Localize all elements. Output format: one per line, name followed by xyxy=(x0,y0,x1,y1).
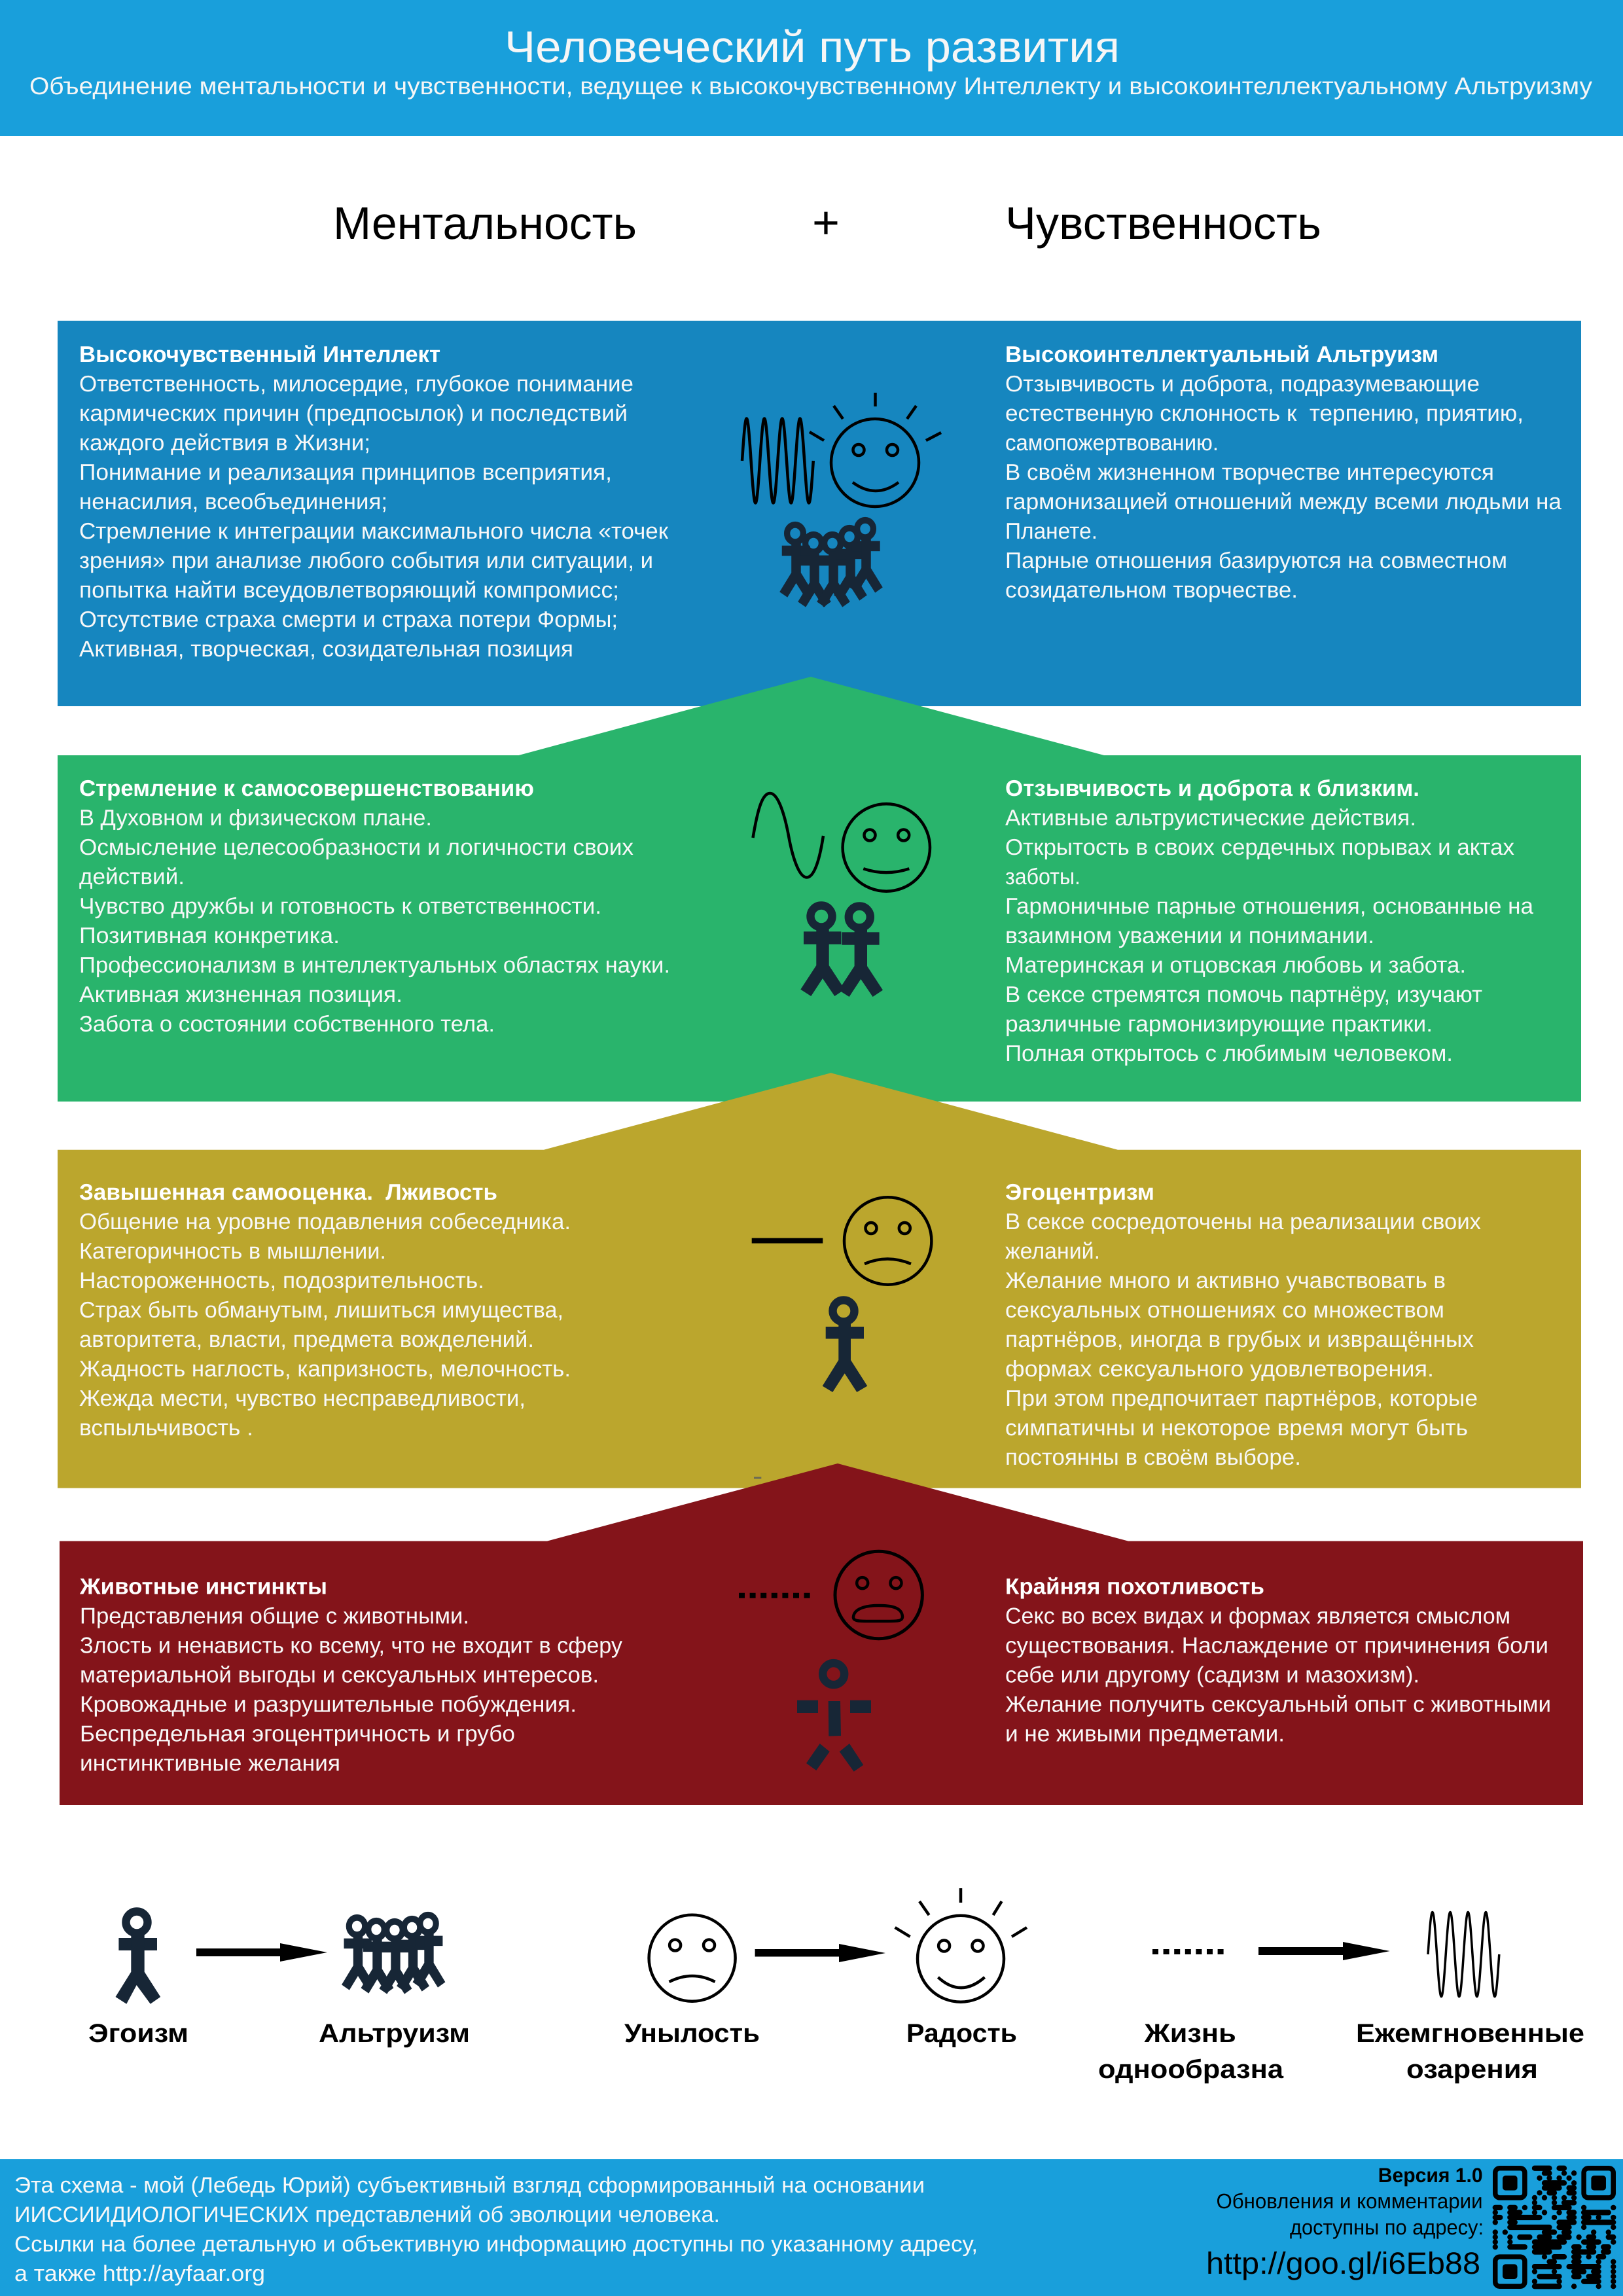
QR code xyxy=(1495,2168,1613,2286)
text: responsiveness and kindness: заботы. xyxy=(1005,865,1080,889)
text: egocentrism: формах сексуального удовлетворения. xyxy=(1005,1357,1434,1382)
text: responsiveness and kindness xyxy=(1005,776,1534,1066)
text: striving for self-improvement: В Духовном и физическом плане. xyxy=(79,806,432,831)
text: inflated self-esteem: Страх быть обманутым, лишиться имущества, xyxy=(79,1298,563,1323)
version and link: Версия 1.0 xyxy=(1378,2164,1483,2187)
heading: sensuality: Чувственность xyxy=(1005,198,1321,249)
text: egocentrism: При этом предпочитает партнёров, которые xyxy=(1005,1386,1478,1411)
text: animal instincts xyxy=(79,1575,623,1776)
text: responsiveness and kindness: взаимном уважении и понимании. xyxy=(1005,924,1374,948)
text: egocentrism: Желание много и активно учавствовать в xyxy=(1005,1268,1446,1293)
icon: dotted line xyxy=(1152,1949,1224,1954)
text: egocentrism: партнёров, иногда в грубых и извращённых xyxy=(1005,1327,1474,1352)
text: striving for self-improvement: Осмысление целесообразности и логичности своих xyxy=(79,835,633,860)
icon: two people xyxy=(800,906,883,997)
text: high-sensual intellect: кармических причин (предпосылок) и последствий xyxy=(79,401,628,426)
icon: neutral face xyxy=(843,804,930,891)
icon: dotted line xyxy=(739,1593,810,1598)
arrow xyxy=(1258,1942,1390,1960)
legend: monotony to insights xyxy=(1098,1912,1584,2084)
text: striving for self-improvement: Стремление к самосовершенствованию xyxy=(79,776,534,801)
label: egoism: Эгоизм xyxy=(88,2019,188,2048)
text: striving for self-improvement: Профессионализм в интеллектуальных областях науки. xyxy=(79,953,670,978)
text: animal instincts: Кровожадные и разрушительные побуждения. xyxy=(80,1693,577,1717)
text: animal instincts: Представления общие с животными. xyxy=(80,1604,469,1628)
footer banner xyxy=(0,2159,1623,2296)
text: extreme lust: Желание получить сексуальный опыт с животными xyxy=(1005,1693,1551,1717)
text: responsiveness and kindness: В сексе стремятся помочь партнёру, изучают xyxy=(1005,982,1482,1007)
label: instant insights: Ежемгновенные xyxy=(1356,2019,1584,2048)
column headings xyxy=(333,197,1321,249)
text: high-intellectual altruism: В своём жизненном творчестве интересуются xyxy=(1005,460,1494,485)
text: animal instincts: Злость и ненависть ко всему, что не входит в сферу xyxy=(80,1634,623,1659)
panel: red level xyxy=(60,1463,1583,1805)
text: inflated self-esteem: Завышенная самооценка. Лживость xyxy=(79,1180,497,1205)
text: extreme lust xyxy=(1005,1575,1551,1746)
footer note xyxy=(14,2173,978,2286)
title: Человеческий путь развития xyxy=(505,22,1120,72)
text: high-intellectual altruism: самопожертвованию. xyxy=(1005,431,1219,456)
icon: frightened face xyxy=(835,1551,922,1639)
text: high-sensual intellect: попытка найти всеудовлетворяющий компромисс; xyxy=(79,578,619,603)
text: egocentrism: Эгоцентризм xyxy=(1005,1180,1154,1205)
text: high-intellectual altruism: естественную склонность к терпению, приятию, xyxy=(1005,401,1524,426)
label: monotonous life xyxy=(1098,2019,1284,2084)
version and link xyxy=(1206,2164,1484,2280)
text: extreme lust: себе или другому (садизм и мазохизм). xyxy=(1005,1662,1419,1687)
text: inflated self-esteem: Настороженность, подозрительность. xyxy=(79,1268,484,1293)
text: high-intellectual altruism: Отзывчивость и доброта, подразумевающие xyxy=(1005,372,1480,397)
text: responsiveness and kindness: Открытость в своих сердечных порывах и актах xyxy=(1005,835,1514,860)
text: extreme lust: и не живыми предметами. xyxy=(1005,1721,1285,1746)
text: high-intellectual altruism: Планете. xyxy=(1005,519,1097,544)
icon: fast wave xyxy=(742,419,813,503)
text: high-sensual intellect: Отсутствие страха смерти и страха потери Формы; xyxy=(79,607,618,632)
icon: egoist person xyxy=(115,1911,160,2004)
text: extreme lust: Крайняя похотливость xyxy=(1005,1575,1264,1600)
subtitle: Объединение ментальности и чувственности, ведущее к высокочувственному Интеллекту и высокоинтеллектуальному Альтруизму xyxy=(29,73,1593,99)
text: inflated self-esteem: Жежда мести, чувство несправедливости, xyxy=(79,1386,526,1411)
legend: gloom to joy xyxy=(624,1888,1027,2048)
arrow xyxy=(196,1943,327,1962)
text: extreme lust: существования. Наслаждение от причинения боли xyxy=(1005,1634,1548,1659)
icon: group of five people xyxy=(779,520,883,607)
legend: egoism to altruism xyxy=(88,1911,470,2048)
text: responsiveness and kindness: Активные альтруистические действия. xyxy=(1005,806,1416,831)
text: animal instincts: инстинктивные желания xyxy=(80,1751,340,1776)
text: responsiveness and kindness: Материнская и отцовская любовь и забота. xyxy=(1005,953,1466,978)
text: inflated self-esteem: авторитета, власти, предмета вожделений. xyxy=(79,1327,534,1352)
text: responsiveness and kindness: Полная открытось с любимым человеком. xyxy=(1005,1041,1453,1066)
text: high-sensual intellect: Ответственность, милосердие, глубокое понимание xyxy=(79,372,633,397)
label: instant insights: озарения xyxy=(1406,2055,1538,2084)
text: striving for self-improvement: действий. xyxy=(79,865,185,889)
text: high-sensual intellect xyxy=(79,342,669,662)
text: high-intellectual altruism xyxy=(1005,342,1562,603)
label: monotonous life: Жизнь xyxy=(1144,2019,1236,2048)
label: monotonous life: однообразна xyxy=(1098,2055,1284,2084)
icon: broken person xyxy=(797,1663,871,1772)
text: high-sensual intellect: ненасилия, всеобъединения; xyxy=(79,490,387,514)
text: egocentrism xyxy=(1005,1180,1481,1470)
icon: joyful face xyxy=(895,1888,1027,2002)
label: instant insights xyxy=(1356,2019,1584,2084)
footer note: а также http://ayfaar.org xyxy=(14,2261,265,2286)
icon: gloomy face xyxy=(649,1915,736,2001)
text: extreme lust: Секс во всех видах и формах является смыслом xyxy=(1005,1604,1510,1628)
text: striving for self-improvement: Забота о состоянии собственного тела. xyxy=(79,1012,495,1037)
text: high-intellectual altruism: созидательном творчестве. xyxy=(1005,578,1298,603)
text: egocentrism: симпатичны и некоторое время могут быть xyxy=(1005,1416,1468,1441)
footer note: Эта схема - мой (Лебедь Юрий) субъективный взгляд сформированный на основании xyxy=(14,2173,925,2198)
arrow xyxy=(755,1944,885,1962)
text: high-sensual intellect: каждого действия в Жизни; xyxy=(79,431,370,456)
heading: mentality: Ментальность xyxy=(333,198,637,249)
text: striving for self-improvement: Активная жизненная позиция. xyxy=(79,982,402,1007)
label: altruism: Альтруизм xyxy=(319,2019,470,2048)
text: high-sensual intellect: Высокочувственный Интеллект xyxy=(79,342,440,367)
text: inflated self-esteem: Общение на уровне подавления собеседника. xyxy=(79,1210,571,1234)
text: high-sensual intellect: зрения» при анализе любого события или ситуации, и xyxy=(79,548,653,573)
version and link: http://goo.gl/i6Eb88 xyxy=(1206,2246,1480,2280)
version and link: доступны по адресу: xyxy=(1290,2215,1484,2239)
panel: blue level xyxy=(58,321,1581,706)
text: egocentrism: постоянны в своём выборе. xyxy=(1005,1445,1301,1470)
text: high-intellectual altruism: гармонизацией отношений между всеми людьми на xyxy=(1005,490,1562,514)
text: high-sensual intellect: Стремление к интеграции максимального числа «точек xyxy=(79,519,669,544)
text: egocentrism: желаний. xyxy=(1005,1239,1100,1264)
version and link: Обновления и комментарии xyxy=(1216,2189,1483,2213)
text: inflated self-esteem: вспыльчивость . xyxy=(79,1416,253,1441)
text: animal instincts: Беспредельная эгоцентричность и грубо xyxy=(80,1721,515,1746)
panel: yellow level xyxy=(58,1073,1581,1488)
footer note: Ссылки на более детальную и объективную информацию доступны по указанному адресу, xyxy=(14,2232,978,2257)
text: inflated self-esteem xyxy=(79,1180,571,1441)
icon: single person xyxy=(823,1300,867,1392)
text: high-intellectual altruism: Высокоинтеллектуальный Альтруизм xyxy=(1005,342,1438,367)
text: inflated self-esteem: Категоричность в мышлении. xyxy=(79,1239,386,1264)
text: responsiveness and kindness: Гармоничные парные отношения, основанные на xyxy=(1005,894,1534,919)
text: animal instincts: материальной выгоды и сексуальных интересов. xyxy=(80,1662,599,1687)
text: high-sensual intellect: Активная, творческая, созидательная позиция xyxy=(79,637,573,662)
icon: radiant smiling face xyxy=(810,393,941,507)
icon: slow wave xyxy=(753,793,823,877)
header banner xyxy=(0,0,1623,136)
text: egocentrism: В сексе сосредоточены на реализации своих xyxy=(1005,1210,1481,1234)
text: egocentrism: сексуальных отношениях со множеством xyxy=(1005,1298,1444,1323)
label: joy: Радость xyxy=(906,2019,1017,2048)
icon: fast wave xyxy=(1428,1912,1499,1996)
text: striving for self-improvement: Чувство дружбы и готовность к ответственности. xyxy=(79,894,601,919)
text: striving for self-improvement xyxy=(79,776,670,1037)
icon: sad face xyxy=(844,1197,931,1285)
text: high-intellectual altruism: Парные отношения базируются на совместном xyxy=(1005,548,1507,573)
panel: green level xyxy=(58,677,1581,1102)
text: inflated self-esteem: Жадность наглость, капризность, мелочность. xyxy=(79,1357,571,1382)
icon: flat line xyxy=(752,1238,823,1244)
footer note: ИИССИИДИОЛОГИЧЕСКИХ представлений об эволюции человека. xyxy=(14,2202,720,2227)
plus sign: + xyxy=(812,197,840,248)
text: responsiveness and kindness: различные гармонизирующие практики. xyxy=(1005,1012,1433,1037)
text: responsiveness and kindness: Отзывчивость и доброта к близким. xyxy=(1005,776,1419,801)
text: striving for self-improvement: Позитивная конкретика. xyxy=(79,924,340,948)
label: gloom: Унылость xyxy=(624,2019,760,2048)
text: high-sensual intellect: Понимание и реализация принципов всеприятия, xyxy=(79,460,612,485)
text: animal instincts: Животные инстинкты xyxy=(79,1575,327,1600)
icon: altruist group xyxy=(342,1915,445,1994)
